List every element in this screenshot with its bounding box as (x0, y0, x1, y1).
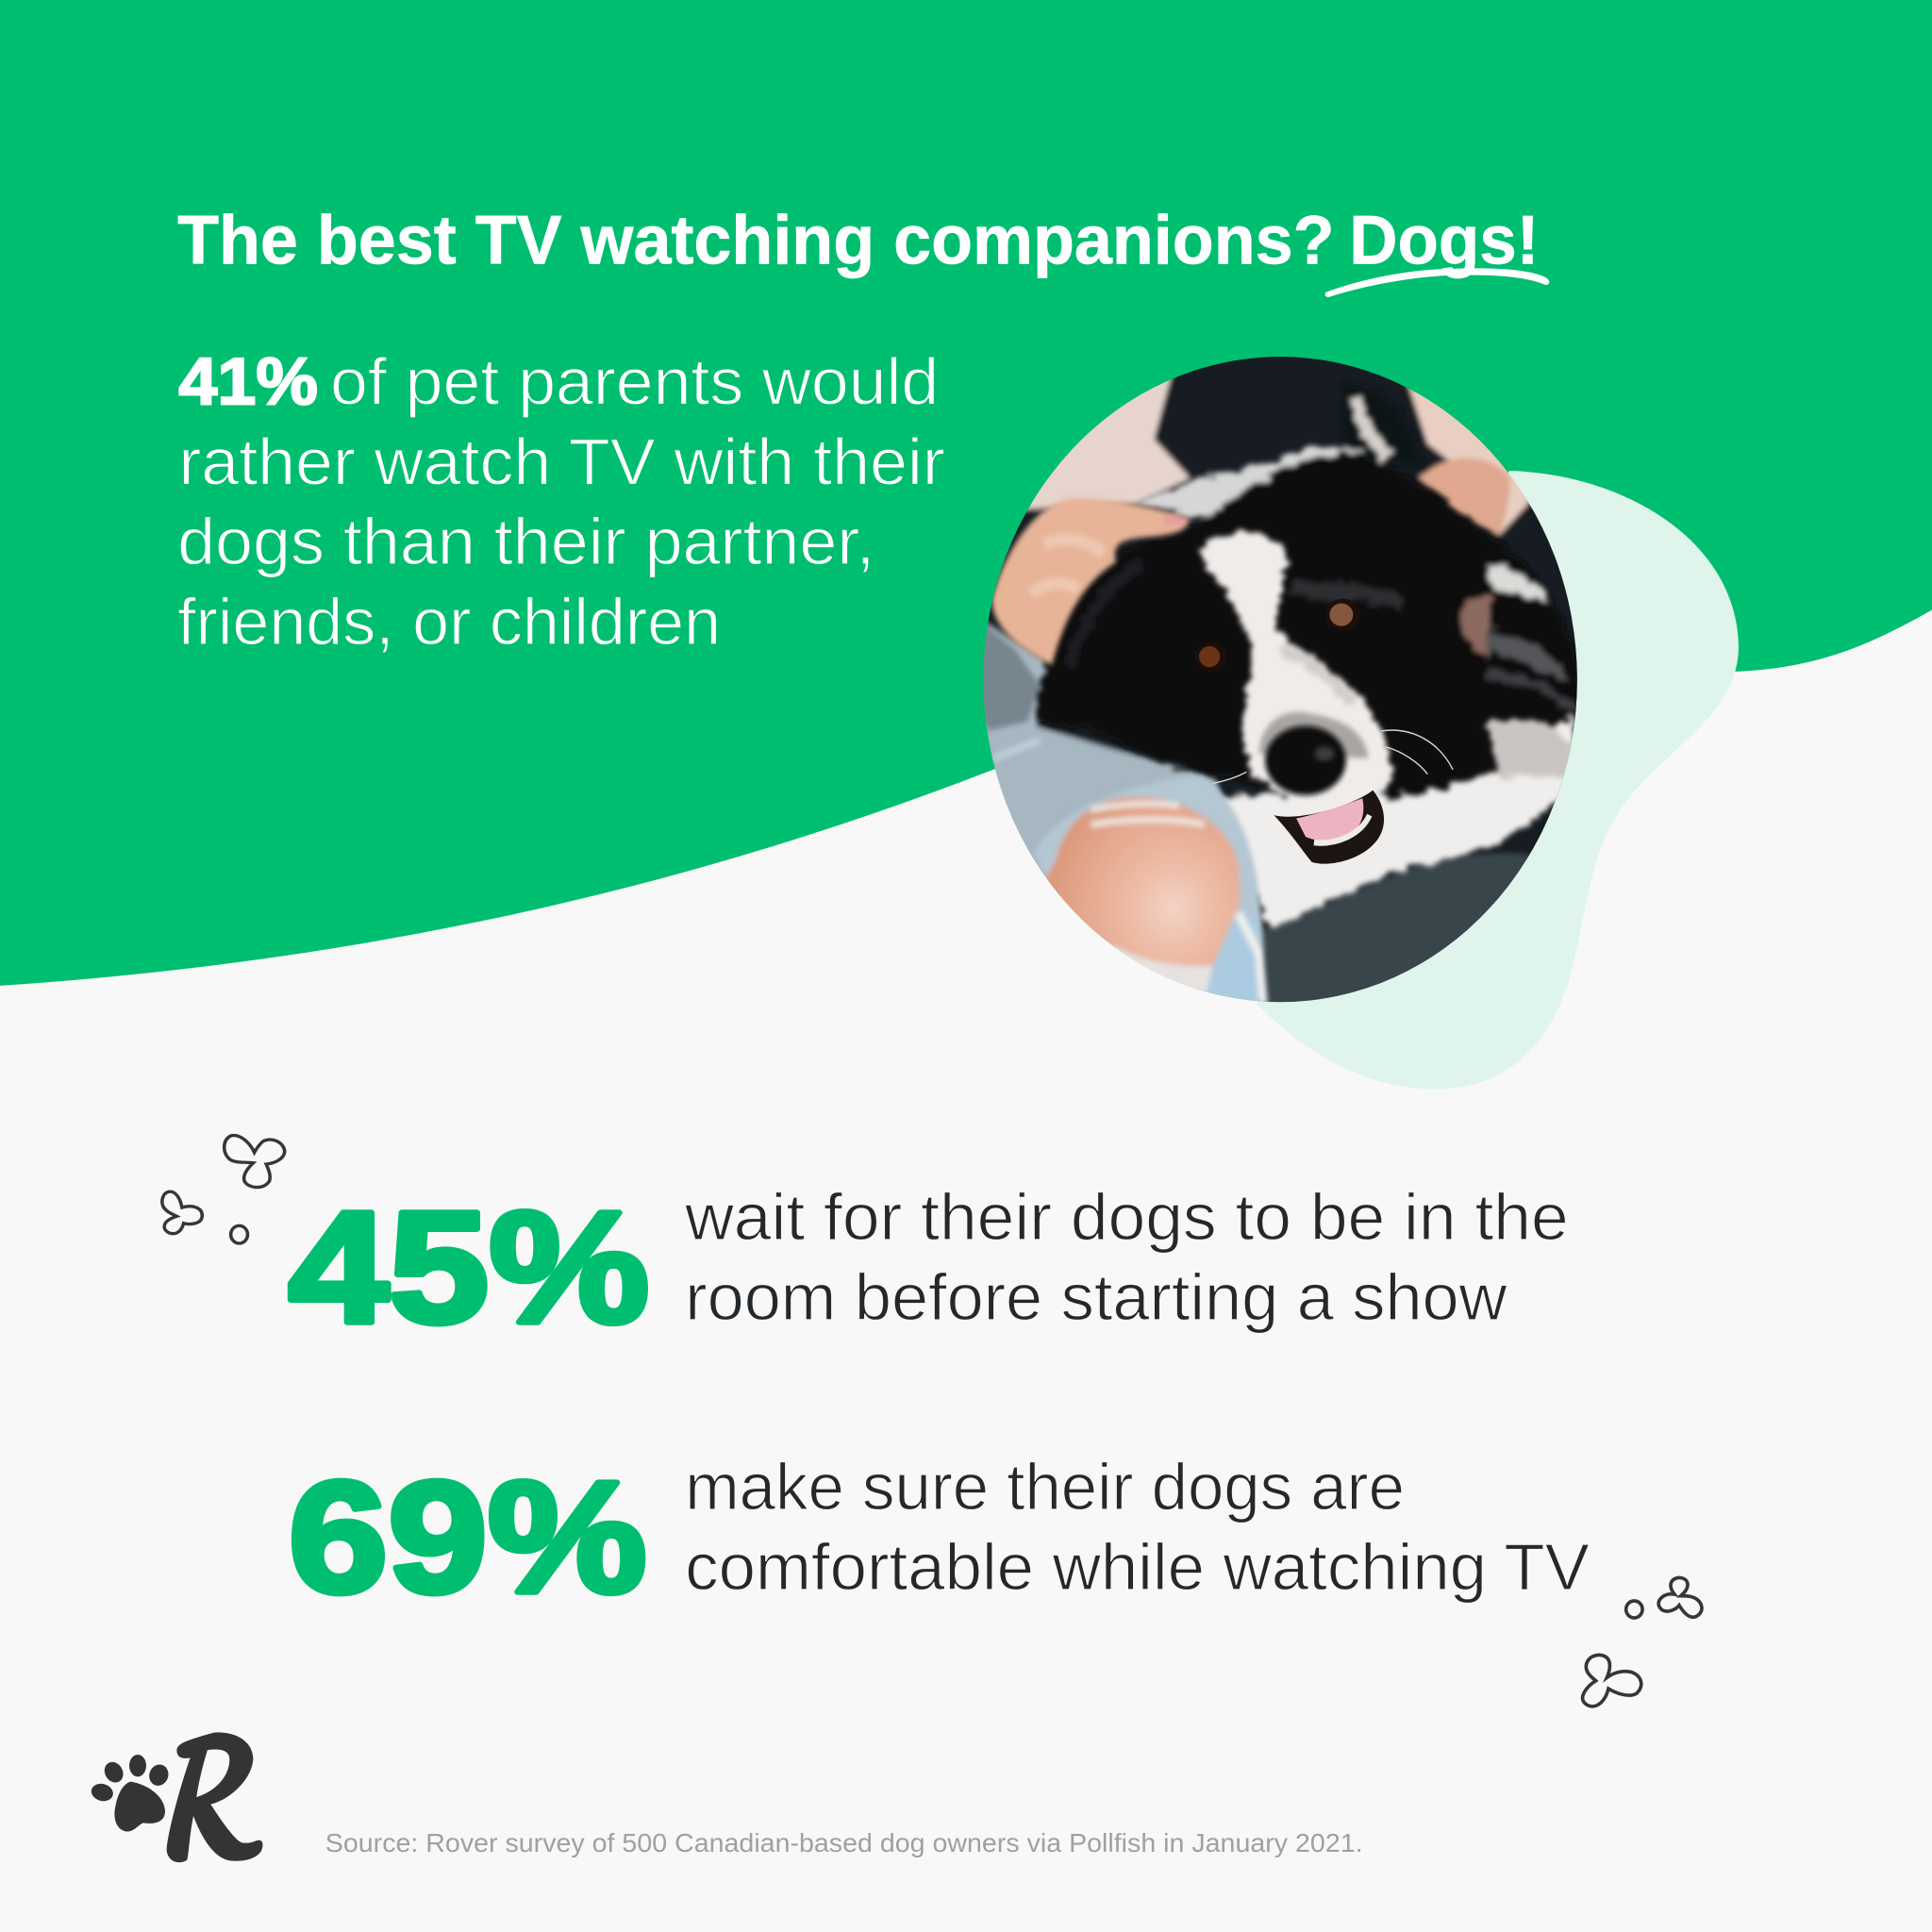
heading: The best TV watching companions? (177, 203, 1335, 279)
heading: Dogs! (1349, 203, 1539, 279)
dog mouth and tongue (1274, 791, 1384, 864)
dog black fur: head, ear and back (1036, 380, 1581, 796)
dog white blaze, muzzle and chest (1200, 530, 1575, 929)
hand petting the dog (991, 498, 1190, 665)
dog whiskers (1213, 730, 1453, 783)
heading underline flourish (1325, 268, 1549, 297)
doodles bottom right (1583, 1577, 1702, 1707)
body statement: 41% of pet parents: dogs than their partner, (177, 505, 874, 578)
dog nose (1259, 712, 1369, 795)
stat 45% description: wait for their dogs to be in the (684, 1180, 1569, 1254)
source note: Source: Rover survey of 500 Canadian-based dog owners via Pollfish in January 2021. (325, 1828, 1363, 1857)
stat 69% description (685, 1450, 1590, 1604)
stat: 69%: 69% (289, 1448, 647, 1626)
body statement: 41% of pet parents: rather watch TV with their (178, 425, 945, 498)
stat: 45%: 45% (289, 1177, 649, 1356)
stat 45% description (684, 1180, 1569, 1334)
torn jeans and knee (994, 740, 1264, 1005)
body statement: 41% of pet parents: 41% (178, 343, 318, 418)
mint blob behind photo (1257, 471, 1739, 1090)
stat 45% description: room before starting a show (685, 1260, 1507, 1334)
green header wave (0, 0, 1932, 986)
photo: border collie on a lap (983, 357, 1577, 1002)
stat 69% description: make sure their dogs are (685, 1450, 1405, 1524)
Rover logo (90, 1732, 262, 1862)
doodles top left (162, 1136, 285, 1243)
stat 69% description: comfortable while watching TV (685, 1530, 1590, 1604)
dog eyes (1195, 599, 1360, 672)
photo background: sweater, shirt, arm, jeans, couch (983, 357, 1577, 1002)
body statement: 41% of pet parents: friends, or children (177, 585, 721, 658)
body statement: 41% of pet parents (177, 343, 945, 658)
body statement: 41% of pet parents: of pet parents would (330, 344, 939, 418)
